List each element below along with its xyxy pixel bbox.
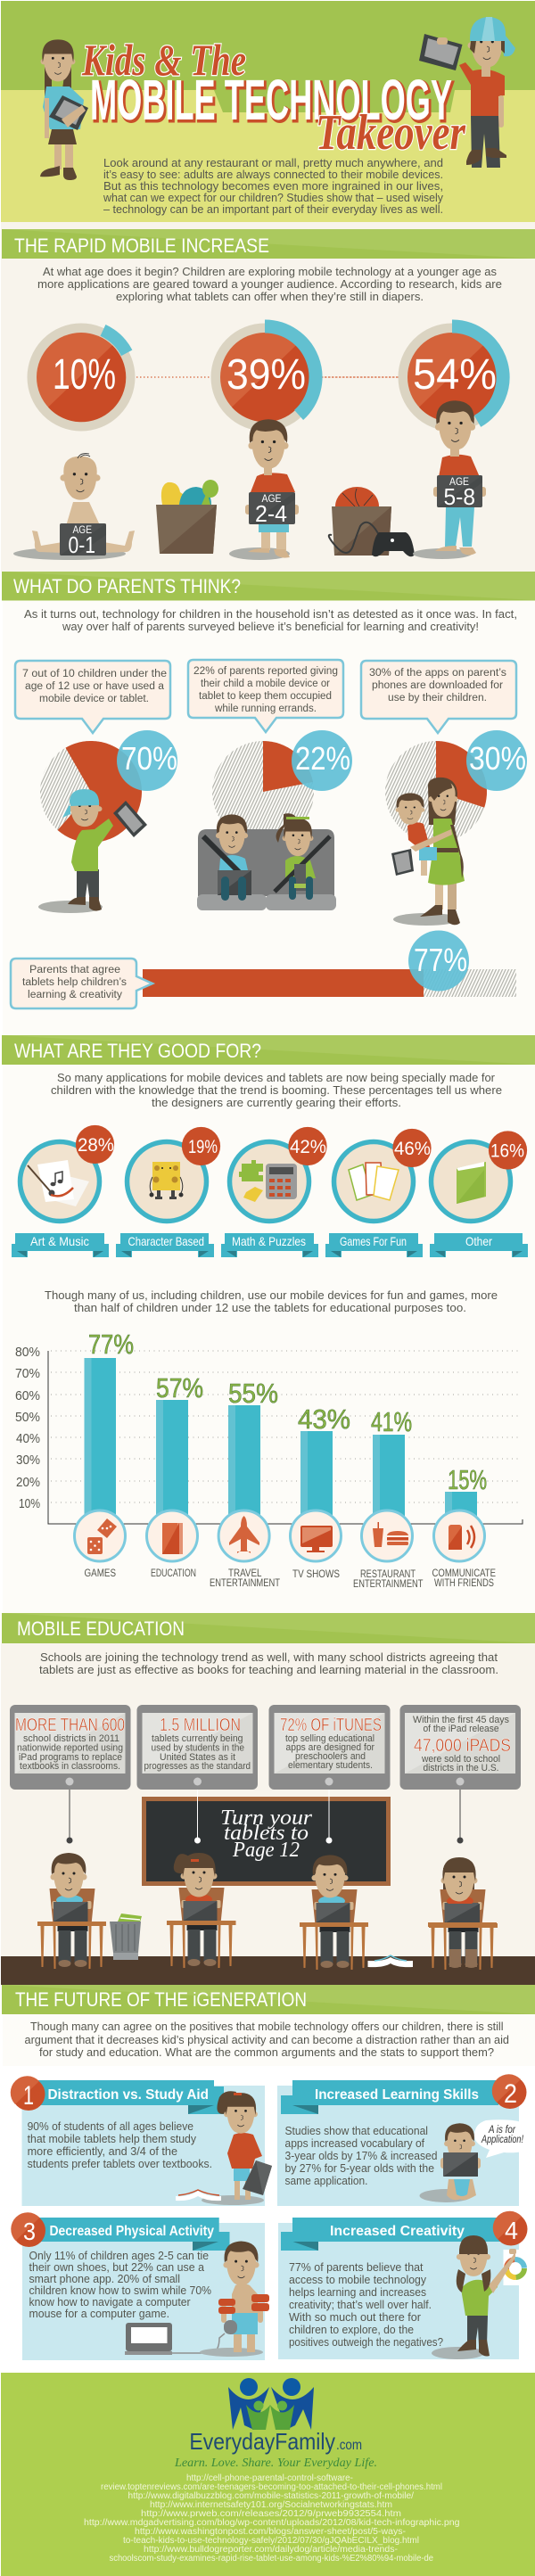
category: character based [127, 1127, 220, 1222]
category: math and puzzles: 42% [290, 1137, 326, 1157]
bar: games 77 [84, 1329, 134, 1524]
axis category labels: ENTERTAINMENT [210, 1576, 281, 1589]
section intro text: for study and education. What are the common arguments and the stats to support them? [39, 2045, 494, 2059]
badge 3: 3 [23, 2218, 36, 2245]
axis category labels: GAMES [84, 1567, 116, 1579]
pie chart: 70 percent [40, 730, 177, 843]
heading: what do parents think: WHAT DO PARENTS THINK? [13, 575, 241, 597]
y axis labels [15, 1345, 40, 1511]
student at desk 4 [428, 1857, 498, 1970]
toy box [156, 480, 218, 554]
character: boy age 5-8 [413, 400, 486, 559]
icon: phone with signal [433, 1510, 485, 1561]
card 3: decreased physical activity [11, 2212, 269, 2360]
pie chart: 30 percent [385, 730, 527, 843]
axis category labels: WITH FRIENDS [434, 1576, 494, 1589]
heading: mobile education: MOBILE EDUCATION [17, 1617, 185, 1640]
body text [29, 2249, 211, 2320]
category: games for fun [333, 1129, 432, 1222]
character: girl with tablet [40, 39, 88, 180]
axis category labels: TRAVEL [228, 1567, 262, 1579]
tablet: 1.5 million: tablets currently being [152, 1733, 243, 1744]
bar: education 57: 57% [156, 1372, 203, 1403]
bar: education 57 [156, 1372, 203, 1524]
donut: 39 percent: 39% [226, 351, 306, 399]
y axis labels: 60% [15, 1388, 40, 1403]
tablet: 1.5 million: progresses as the standard [144, 1761, 251, 1772]
panel: future of the igeneration [1, 1985, 535, 2576]
body text: helps learning and increases [289, 2285, 426, 2299]
wordmark: .com [336, 2438, 362, 2453]
laptop [125, 2323, 225, 2355]
donut: 54 percent [403, 326, 503, 426]
tablet: 47,000 ipads [399, 1705, 521, 1790]
ribbon 3: Decreased Physical Activity [50, 2224, 214, 2239]
tablet: 47,000 ipads: Within the first 45 days [413, 1715, 509, 1725]
intro text: it’s easy to see: adults are always connected to their mobile devices. [103, 168, 443, 181]
heading: rapid mobile increase: THE RAPID MOBILE INCREASE [14, 235, 269, 257]
ribbon 1 [34, 2080, 224, 2114]
donut: 10 percent [32, 328, 130, 426]
character: boy age 2-4: 2-4 [255, 500, 287, 527]
connector lines from tablets [66, 1790, 464, 1844]
box with ball and game controller [329, 487, 415, 556]
tagline: Learn. Love. Share. Your Everyday Life. [174, 2457, 377, 2470]
category: character based: 19% [188, 1137, 218, 1157]
speech bubble: 7 out of 10 [15, 661, 170, 733]
ribbon: games for fun: Games For Fun [340, 1234, 407, 1248]
body text: 77% of parents believe that [289, 2260, 424, 2274]
chart intro text [45, 1288, 498, 1314]
chalkboard: Turn your [220, 1806, 313, 1830]
ribbon: art and music [12, 1233, 109, 1257]
ribbon: art and music: Art & Music [30, 1234, 89, 1248]
panel: mobile education [1, 1613, 535, 1985]
pie chart: 70 percent: 70% [121, 740, 177, 777]
section intro text [25, 2020, 509, 2059]
speech bubble: 30 percent: phones are downloaded for [372, 680, 503, 691]
character: boy in green shirt with tablet [38, 789, 147, 913]
body text: by 27% for 5-year olds with the [285, 2161, 434, 2175]
bar: travel entertainment 55 [228, 1378, 278, 1524]
icon: airplane [218, 1510, 269, 1561]
student at desk 1 [37, 1853, 106, 1969]
section intro text [39, 1650, 498, 1676]
character: baby age 0-1: AGE [73, 523, 92, 536]
body text: their own shoes, but 22% can use a [29, 2260, 205, 2274]
tablet: more than 600: iPad programs to replace [19, 1752, 122, 1763]
category: art and music: 28% [78, 1135, 114, 1156]
badge 4 [493, 2211, 528, 2245]
panel: what do parents think [2, 572, 535, 1035]
pie chart: 30 percent: 30% [469, 740, 526, 777]
donut: 39 percent [216, 326, 316, 426]
tablet: more than 600: textbooks in classrooms. [20, 1761, 120, 1772]
speech bubble: 7 out of 10: mobile device or tablet. [39, 694, 149, 704]
ribbon: math and puzzles: Math & Puzzles [232, 1234, 306, 1248]
speech bubble: a is for application [474, 2119, 535, 2158]
body text [28, 2119, 212, 2170]
speech bubble: 22 percent [188, 660, 343, 732]
body text: that mobile tablets help them study [28, 2132, 196, 2145]
icon: food and drink [362, 1510, 412, 1561]
body text: Studies show that educational [285, 2124, 428, 2137]
section intro text: Though many can agree on the positives that mobile technology offers our children, there is still [30, 2020, 504, 2033]
bar: tv shows 43: 43% [298, 1403, 350, 1435]
section intro text [24, 607, 517, 633]
body text [289, 2260, 443, 2349]
intro text: Look around at any restaurant or mall, pretty much anywhere, and [103, 156, 443, 169]
body text: apps increased vocabulary of [285, 2136, 424, 2150]
speech bubble: parents that agree: learning & creativity [28, 990, 122, 1000]
y axis labels: 40% [16, 1431, 40, 1446]
speech bubble: 30 percent [361, 661, 516, 733]
category: games for fun: 46% [394, 1139, 431, 1159]
speech bubble: 7 out of 10: 7 out of 10 children under the [22, 669, 167, 679]
ribbon 2: Increased Learning Skills [315, 2087, 479, 2103]
header background [1, 1, 535, 222]
character: girl with tablet and book [176, 2091, 272, 2205]
tablet: more than 600: nationwide reported using [17, 1742, 123, 1753]
speech bubble: 30 percent: use by their children. [388, 693, 487, 704]
source citations: http://www.prweb.com/releases/2012/9/prweb9932554.htm [141, 2509, 401, 2519]
source citations: http://cell-phone-parental-control-software- [186, 2473, 353, 2483]
chalkboard [142, 1797, 391, 1886]
tablet: more than 600 [10, 1705, 130, 1790]
illustration: two kids buckled in car seat [197, 813, 336, 910]
source citations: review.toptenreviews.com/are-teenagers-becoming-too-attached-to-their-cell-phones.html [101, 2482, 442, 2492]
source citations: http://www.digitalbuzzblog.com/mobile-statistics-2011-growth-of-mobile/ [128, 2491, 414, 2501]
ribbon: games for fun [325, 1233, 423, 1257]
ribbon 4 [281, 2218, 501, 2251]
tablet: 47,000 ipads: of the iPad release [423, 1724, 499, 1734]
section intro text: exploring what tablets can offer when they’re still in diapers. [116, 290, 424, 303]
heading: future of the igeneration: THE FUTURE OF THE iGENERATION [15, 1988, 307, 2011]
ribbon 4: Increased Creativity [330, 2224, 465, 2239]
tablet: 72 percent of itunes: apps are designed for [285, 1742, 374, 1753]
character: baby age 0-1 [13, 454, 135, 560]
ribbon: character based: Character Based [128, 1234, 204, 1248]
body text: With so much out there for [289, 2310, 422, 2324]
body text: same application. [285, 2174, 367, 2187]
character: boy age 2-4 [229, 419, 299, 560]
intro text: what can we expect for our children? Studies show that – used wisely [103, 191, 443, 204]
category: other [432, 1131, 527, 1222]
ribbon: character based [116, 1233, 214, 1257]
tablet: 1.5 million: United States as it [160, 1752, 235, 1763]
tablet: more than 600: MORE THAN 600 [15, 1716, 125, 1735]
character: boy with cap holding tablet [419, 17, 515, 168]
bar: travel entertainment 55: 55% [228, 1378, 278, 1409]
source citations: http://www.mdgadvertising.com/blog/wp-content/uploads/2012/08/kid-tech-infographic.png [84, 2518, 460, 2528]
bar: games 77: 77% [88, 1329, 134, 1360]
ribbon 2 [281, 2080, 498, 2114]
heading: what are they good for: WHAT ARE THEY GOOD FOR? [14, 1040, 261, 1062]
tablet: 72 percent of itunes: preschoolers and [295, 1751, 366, 1762]
chalkboard: tablets to [224, 1822, 309, 1845]
intro text: But as this technology becomes even more ingrained in our lives, [103, 179, 443, 193]
icon: dice [75, 1510, 125, 1561]
section intro text [51, 1071, 502, 1109]
character: mother and son with tablet [391, 778, 465, 926]
badge 1 [11, 2076, 45, 2111]
tablet: 72 percent of itunes: 72% OF iTUNES [280, 1716, 382, 1735]
badge 2: 2 [504, 2079, 517, 2109]
speech bubble: parents that agree [11, 959, 152, 1008]
bar: restaurant entertainment 41 [371, 1406, 412, 1524]
dotted connector lines [40, 376, 406, 378]
character: boy age 5-8: 5-8 [444, 483, 475, 510]
body text: children to explore, do the [289, 2323, 414, 2336]
chalkboard: Page 12 [232, 1839, 300, 1862]
y axis labels: 80% [15, 1345, 40, 1360]
source citations: schoolscom-study-examines-rapid-rise-tablet-use-among-kids-%E2%80%94-mobile-de [109, 2554, 433, 2564]
intro text: – technology can be an important part of their everyday lives as well. [103, 202, 443, 216]
tablet: 72 percent of itunes [269, 1705, 391, 1790]
icon: tv [291, 1510, 341, 1561]
body text: know how to navigate a computer [29, 2295, 191, 2309]
axis category labels [84, 1567, 496, 1590]
open book on floor [367, 1955, 413, 1967]
section intro text: As it turns out, technology for children in the household isn’t as detested as it once was. In fact, [24, 607, 517, 621]
intro text [103, 156, 443, 216]
body text: students prefer tablets over textbooks. [28, 2157, 212, 2170]
tablet: more than 600: school districts in 2011 [23, 1733, 119, 1744]
tablet: 47,000 ipads: 47,000 iPADS [414, 1736, 511, 1756]
bar: tv shows 43 [298, 1403, 350, 1524]
section intro text: So many applications for mobile devices and tablets are now being specially made for [57, 1071, 496, 1084]
character: baby age 0-1: 0-1 [68, 531, 95, 558]
title [81, 35, 466, 160]
white device with colour wheel [503, 2250, 530, 2285]
section intro text: way over half of parents surveyed believe it’s beneficial for learning and creativity! [62, 620, 479, 633]
source citations: http://www.bulldogreporter.com/dailydog/article/media-trends- [144, 2545, 398, 2555]
section intro text: argument that it decreases kid’s physical activity and can become a distraction rather than an aid [25, 2033, 509, 2046]
section intro text: tablets are just as effective as books for teaching and learning material in the classroom. [39, 1663, 498, 1676]
speech bubble: parents that agree: tablets help children’s [22, 977, 127, 988]
body text: smart phone app. 20% of small [29, 2272, 180, 2285]
character: girl reaching for device [432, 2235, 516, 2359]
source citations: http://www.washingtonpost.com/blogs/answer-sheet/post/5-ways- [135, 2527, 406, 2537]
speech bubble: a is for application: A is for [488, 2123, 516, 2136]
body text: access to mobile technology [289, 2273, 426, 2286]
donut: 54 percent: 54% [413, 351, 497, 399]
ribbon: other: Other [465, 1234, 492, 1248]
ribbon: math and puzzles [221, 1233, 318, 1257]
body text: 3-year olds by 17% & increased [285, 2149, 437, 2162]
bar: restaurant entertainment 41: 41% [371, 1406, 412, 1437]
tablet: 1.5 million [137, 1705, 258, 1790]
section intro text: children with the knowledge that the trend is booming. These percentages tell us where [51, 1083, 502, 1097]
tablet: 1.5 million: 1.5 MILLION [160, 1716, 241, 1735]
floor [1, 1956, 535, 1985]
bar: communicate with friends 15: 15% [448, 1464, 487, 1495]
student at desk 2 [167, 1853, 235, 1968]
badge 3 [11, 2212, 45, 2247]
body text: 90% of students of all ages believe [28, 2119, 193, 2133]
body text: creativity; that’s well over half. [289, 2298, 432, 2311]
ribbon 1: Distraction vs. Study Aid [48, 2087, 209, 2103]
speech bubble: 7 out of 10: age of 12 use or have used a [25, 681, 165, 692]
axis category labels: COMMUNICATE [432, 1567, 496, 1579]
body text: mouse for a computer game. [29, 2307, 169, 2320]
body text [285, 2124, 437, 2187]
source citations: to-teach-kids-to-use-technology-safely/2012/07/30/gJQAbECILX_blog.html [123, 2536, 419, 2546]
axis category labels: TV SHOWS [292, 1568, 340, 1580]
title: Takeover [316, 105, 466, 160]
card 2: increased learning skills [277, 2074, 535, 2206]
panel: rapid mobile increase [1, 222, 535, 572]
section intro text: At what age does it begin? Children are exploring mobile technology at a younger age as [43, 265, 497, 278]
logo: everyday family figures [228, 2378, 314, 2430]
category: other: 16% [490, 1141, 524, 1161]
body text: Only 11% of children ages 2-5 can tie [29, 2249, 209, 2262]
card 4: increased creativity [278, 2211, 530, 2359]
speech bubble: parents that agree: Parents that agree [29, 965, 120, 975]
category: math and puzzles [230, 1127, 327, 1222]
ribbon: other [430, 1233, 528, 1257]
section intro text: more applications are geared toward a younger audience. According to research, kids are [37, 277, 502, 291]
character: boy age 5-8: AGE [449, 475, 469, 488]
tablet: 72 percent of itunes: elementary students. [288, 1760, 373, 1771]
pie chart: 22 percent: 22% [295, 740, 350, 777]
ribbon 3 [34, 2218, 230, 2251]
icon: book [146, 1510, 198, 1561]
section intro text [37, 265, 502, 303]
speech bubble: 22 percent: tablet to keep them occupied [199, 691, 332, 702]
wastebasket with book [110, 1913, 142, 1960]
section intro text: the designers are currently gearing their efforts. [152, 1096, 401, 1109]
speech bubble: 30 percent: 30% of the apps on parent’s [369, 668, 506, 679]
character: boy with floaties and mouse [200, 2242, 269, 2357]
character: boy age 2-4: AGE [262, 492, 282, 505]
speech bubble: 22 percent: while running errands. [214, 704, 317, 714]
wordmark: EverydayFamily [189, 2428, 335, 2455]
speech bubble: 22 percent: their child a mobile device or [201, 679, 330, 689]
y axis labels: 70% [15, 1366, 40, 1381]
bar: 77 percent of parents agree [143, 931, 516, 997]
axis category labels: EDUCATION [151, 1567, 196, 1579]
footer panel [1, 2373, 535, 2576]
bar chart: tablet use [15, 1329, 523, 1524]
y axis labels: 10% [19, 1496, 40, 1511]
character: baby with tablet [419, 2123, 481, 2202]
bar: 77 percent of parents agree: 77% [414, 942, 467, 978]
donut: 10 percent: 10% [53, 351, 116, 399]
tablet: 1.5 million: used by students in the [152, 1742, 244, 1753]
axis category labels: RESTAURANT [360, 1568, 416, 1580]
chart intro text: than half of children under 12 use the tablets for educational purposes too. [74, 1301, 466, 1314]
tablet: 47,000 ipads: districts in the U.S. [423, 1763, 499, 1774]
y axis labels: 20% [16, 1475, 40, 1490]
source citations [84, 2473, 460, 2564]
panel: what are they good for [2, 1035, 535, 1613]
body text: positives outweigh the negatives? [289, 2335, 443, 2349]
axis category labels: ENTERTAINMENT [353, 1577, 424, 1590]
badge 4: 4 [505, 2217, 518, 2244]
bar: communicate with friends 15 [445, 1464, 487, 1524]
y axis labels: 30% [16, 1453, 40, 1468]
tablet: 72 percent of itunes: top selling educational [285, 1733, 374, 1744]
title: Kids & The [81, 35, 246, 85]
body text: more efficiently, and 3/4 of the [28, 2144, 177, 2158]
section intro text: Schools are joining the technology trend as well, with many school districts agreeing that [40, 1650, 498, 1664]
chart intro text: Though many of us, including children, use our mobile devices for fun and games, more [45, 1288, 498, 1302]
source citations: http://www.internetsafety101.org/Socialnetworkingstats.htm [150, 2500, 392, 2510]
tablet: 47,000 ipads: were sold to school [421, 1754, 500, 1765]
pie chart: 22 percent [212, 730, 352, 843]
y axis labels: 50% [15, 1410, 40, 1425]
speech bubble: 22 percent: 22% of parents reported giving [193, 666, 338, 677]
student at desk 3 [300, 1855, 368, 1970]
card 1: distraction vs study aid [11, 2076, 272, 2206]
badge 1: 1 [23, 2081, 34, 2111]
category: art and music [20, 1125, 114, 1222]
badge 2 [492, 2074, 526, 2109]
body text: children know how to swim while 70% [29, 2284, 211, 2297]
